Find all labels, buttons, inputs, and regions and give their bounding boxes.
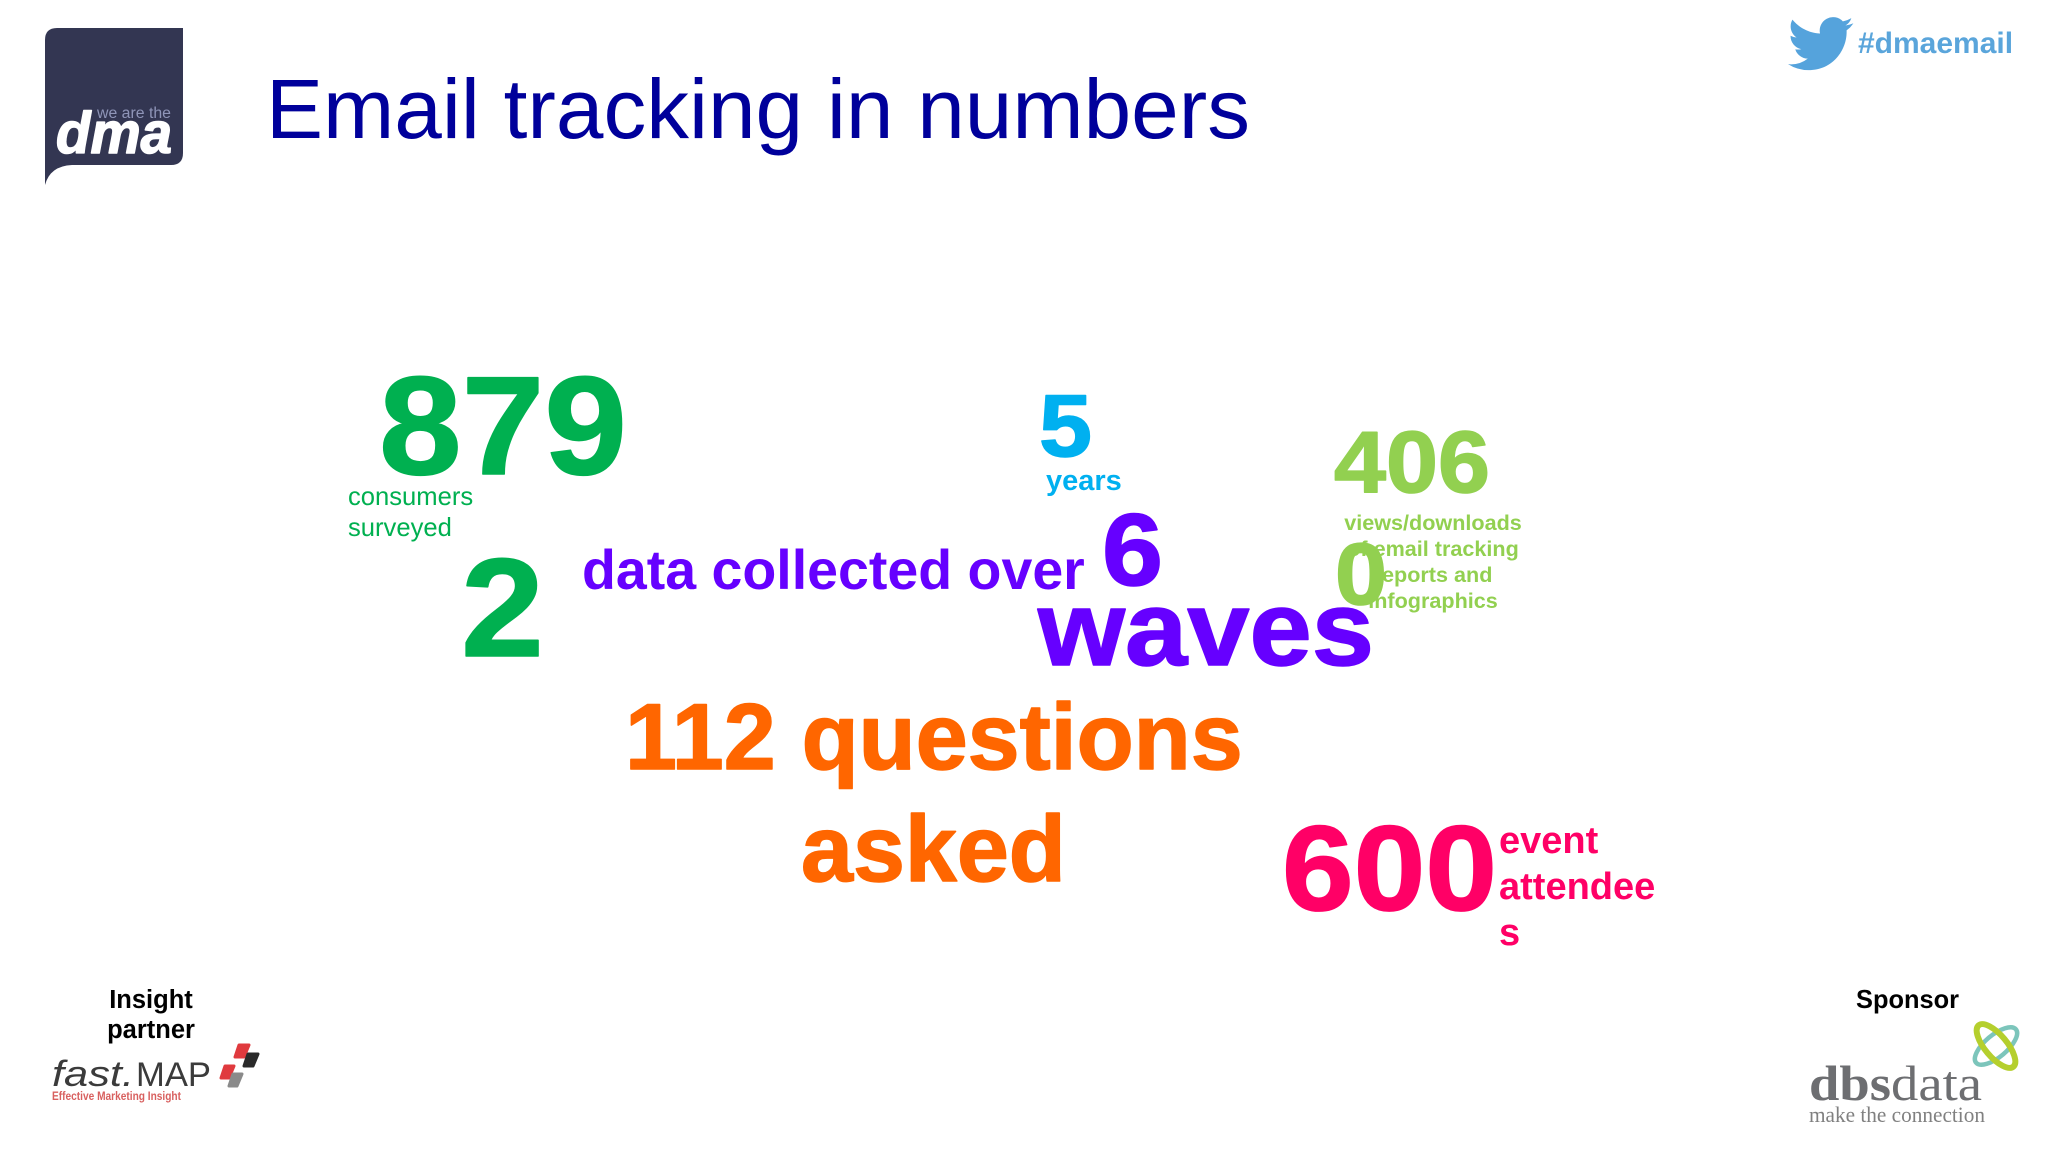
logo: fast.MAP: fast. (52, 1053, 134, 1094)
icon: orbit rings (1969, 1018, 2023, 1074)
stat: 879 consumers surveyed: consumers (348, 483, 473, 511)
hashtag text: #dmaemail (1858, 27, 2013, 60)
stat: data collected over 6 waves: data collected over (582, 539, 1085, 601)
stat: 112 questions asked: asked (801, 796, 1066, 901)
stat: 879 consumers surveyed: surveyed (348, 514, 452, 542)
stat: data collected over 6 waves (582, 493, 1374, 688)
insight partner heading (107, 986, 195, 1044)
logo: dbsdata: make the connection (1809, 1102, 1985, 1127)
logo: we are the dma: we are the (96, 105, 171, 122)
logo: dbsdata: dbsdata (1809, 1055, 1982, 1111)
logo: dbsdata (1809, 1018, 2023, 1127)
stat: 5 years (1039, 376, 1122, 497)
stat: 112 questions asked: 112 questions (625, 684, 1243, 789)
stat: 600 event attendees: 600 (1282, 800, 1497, 936)
stat: 5 years: 5 (1039, 376, 1092, 475)
stat: 600 event attendees (1282, 800, 1655, 954)
stat: 112 questions asked (625, 684, 1243, 901)
stat: 406 views/downloads: infographics (1368, 588, 1498, 613)
insight partner heading: Insight (109, 986, 193, 1014)
twitter hashtag (1788, 17, 2013, 70)
sponsor heading: Sponsor (1856, 984, 1959, 1014)
stat: 406 views/downloads: views/downloads (1344, 510, 1522, 535)
insight partner heading: partner (107, 1016, 195, 1044)
stat: data collected over 6 waves: waves (1037, 570, 1374, 688)
icon: twitter bird (1788, 17, 1853, 70)
logo: fast.MAP: Effective Marketing Insight (52, 1091, 181, 1103)
logo: we are the dma: dma (56, 101, 172, 166)
stat: 600 event attendees: s (1499, 912, 1520, 954)
logo: fast.MAP (52, 1045, 258, 1103)
stat: 406 views/downloads: 406 (1334, 414, 1490, 511)
title: Email tracking in numbers (266, 62, 1250, 156)
stat: data collected over 6 waves: 6 (1102, 493, 1163, 607)
icon: fast.MAP squares (221, 1045, 258, 1086)
stat: 406 views/downloads: of email tracking (1347, 536, 1519, 561)
stat: 406 views/downloads: reports and (1374, 562, 1492, 587)
stat: 5 years: years (1046, 465, 1122, 497)
stat: 600 event attendees: attendee (1499, 866, 1655, 908)
logo: fast.MAP: MAP (136, 1056, 211, 1094)
logo: we are the dma (45, 28, 183, 185)
stat: 879 consumers surveyed: 2 (461, 529, 544, 686)
stat: 406 views/downloads: 0 (1335, 526, 1387, 623)
stat: 879 consumers surveyed: 879 (379, 347, 627, 504)
stat: 406 views/downloads (1334, 414, 1522, 623)
stat: 600 event attendees: event (1499, 820, 1599, 862)
stat: 879 consumers surveyed (348, 347, 627, 686)
